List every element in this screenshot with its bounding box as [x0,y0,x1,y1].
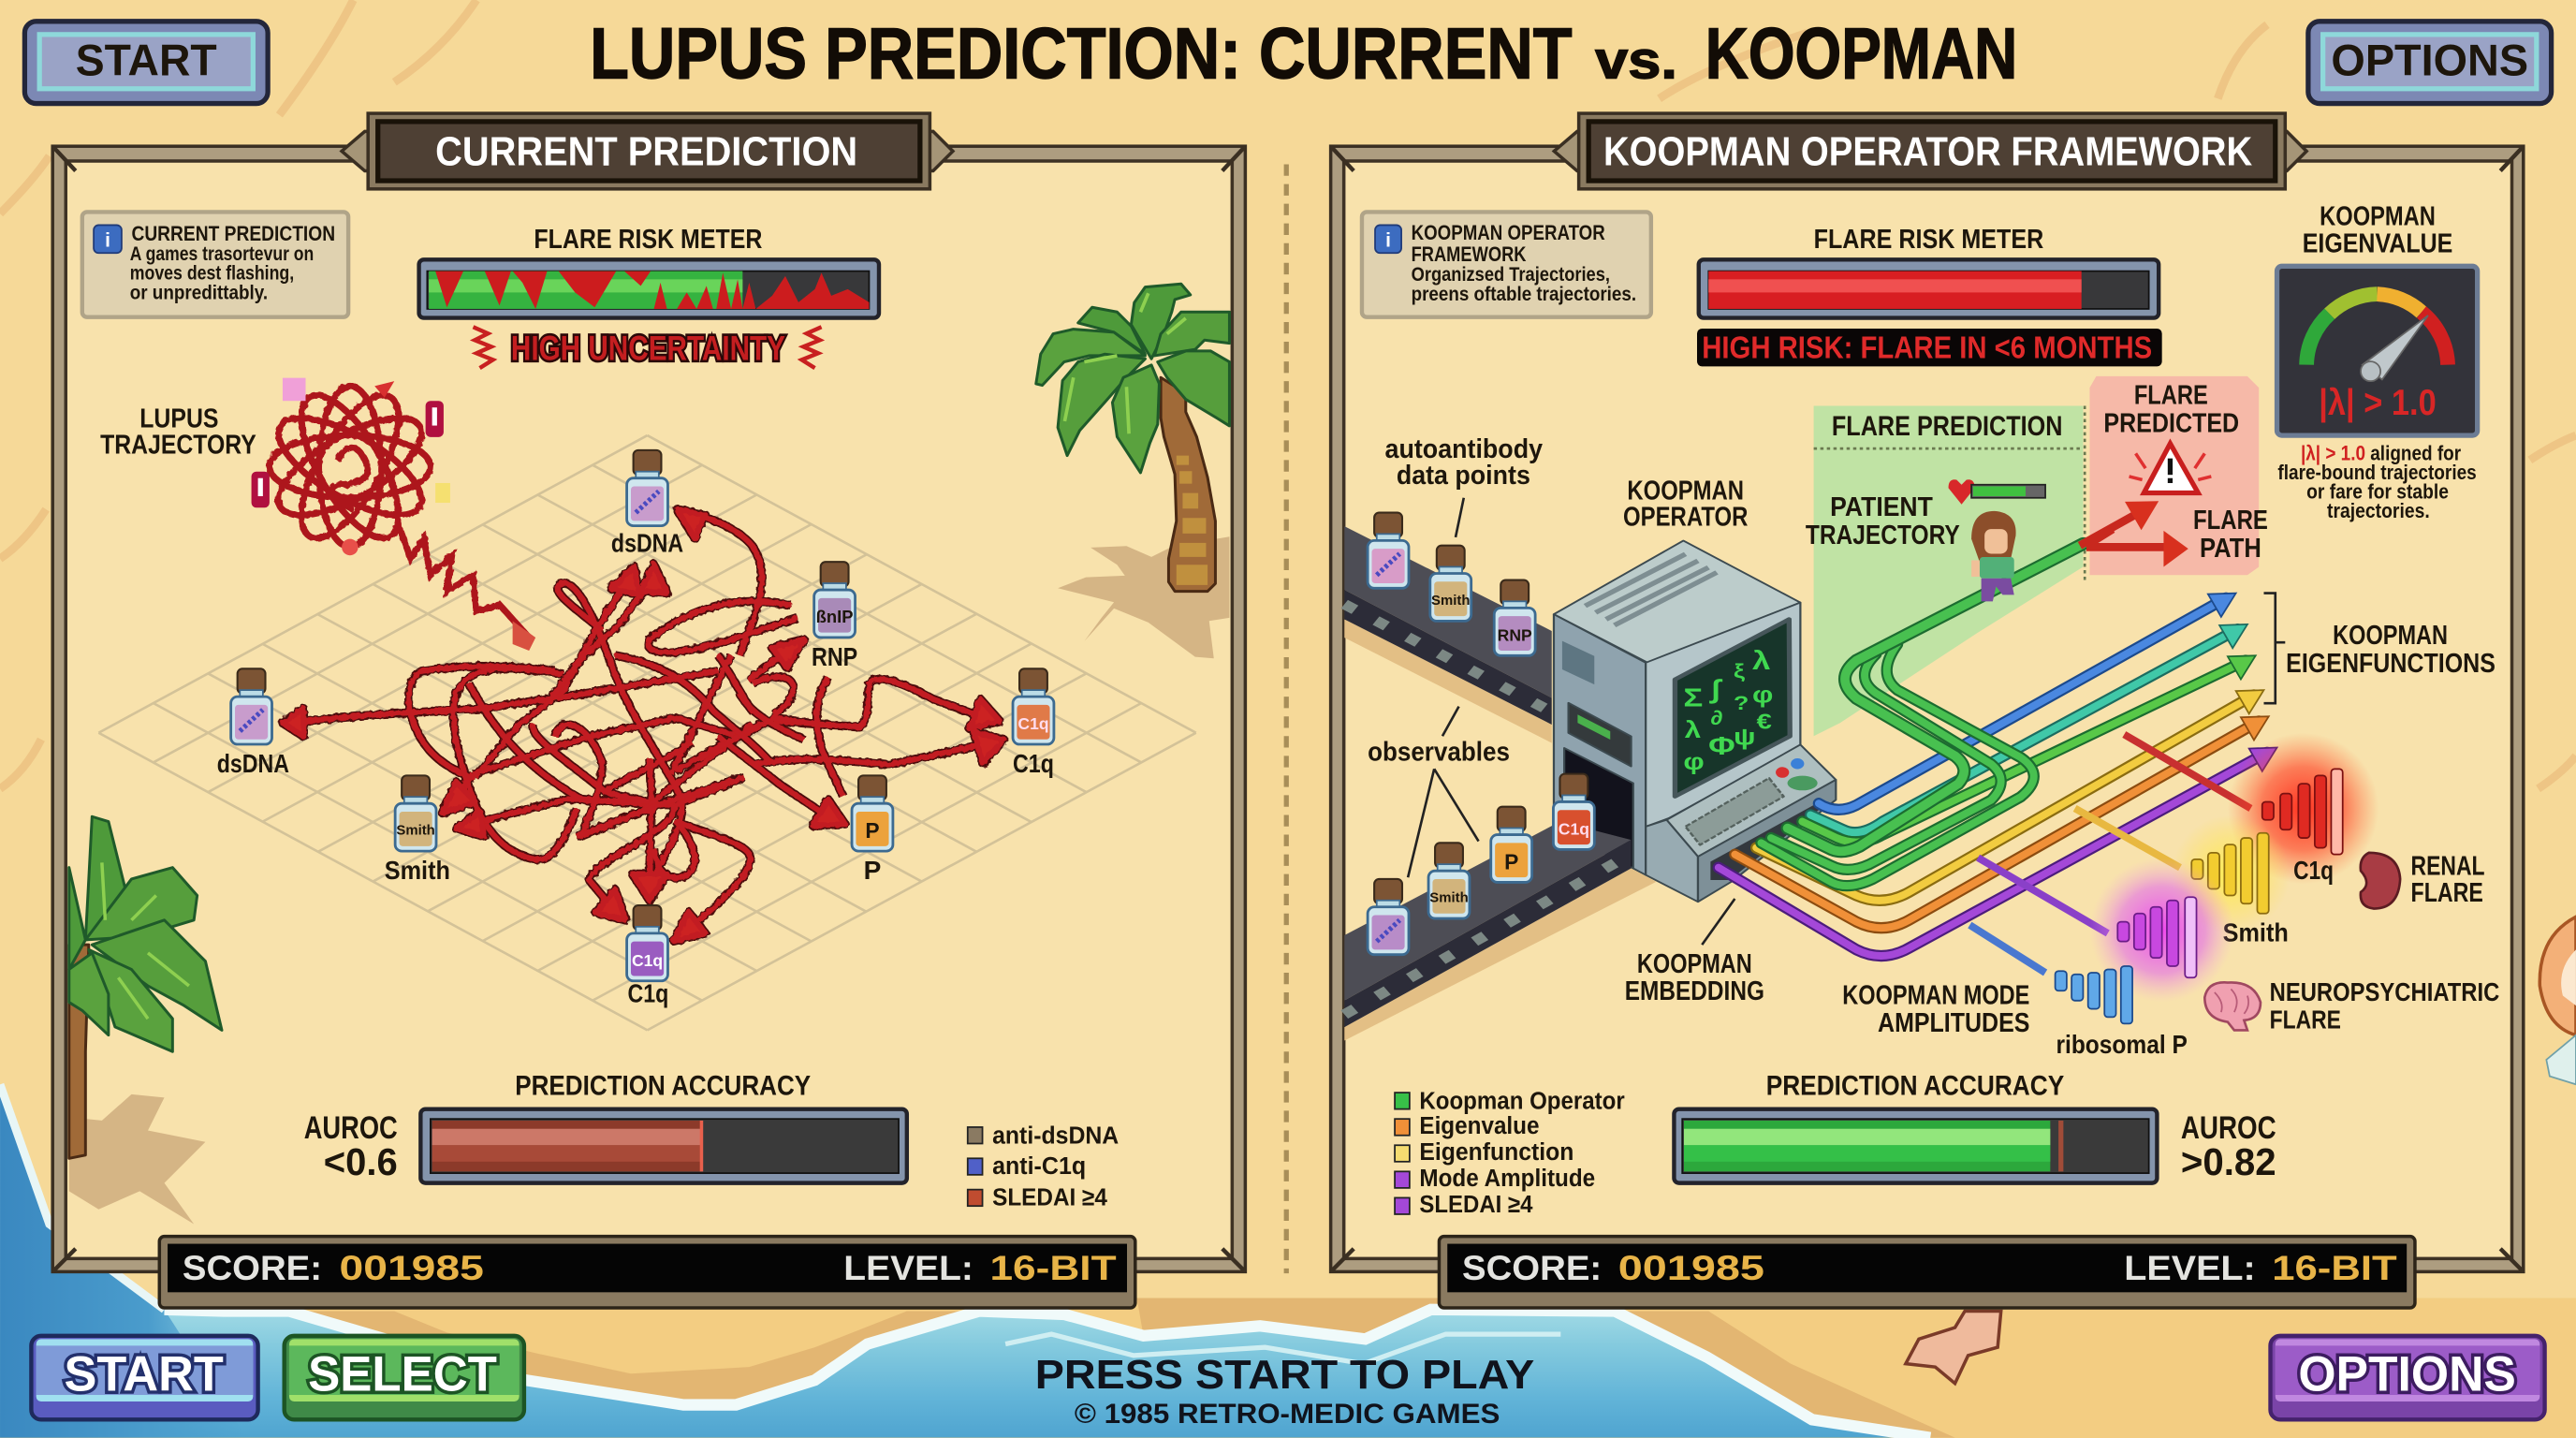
lupus trajectory label: LUPUS [139,404,218,433]
koopman eigenvalue gauge: KOOPMAN [2320,201,2436,231]
koopman operator machine [1554,541,1836,902]
vial: bottom C1q [1553,774,1594,849]
eigenvalue caption: or fare for stable [2306,479,2449,503]
legend: SLEDAI ≥4 [992,1182,1107,1211]
label: flare path [2193,506,2268,564]
header [342,113,953,189]
high uncertainty warning: HIGH UNCERTAINTY [511,329,785,367]
score bar: SCORE: [183,1249,322,1287]
label: autoantibody data points: data points [1397,461,1530,491]
mode bars: purple [2089,858,2234,1003]
vial: P [852,775,893,851]
panel: current prediction [52,113,1245,1308]
auroc value [2181,1110,2276,1183]
vial: bottom C1q: C1q [1559,820,1589,839]
palm tree left [69,816,222,1224]
auroc value [304,1110,398,1183]
info box: KOOPMAN OPERATOR [1412,221,1605,244]
screen glyphs: Σ [1683,682,1703,712]
label: C1q bottom: C1q [627,979,668,1008]
flare risk meter [419,225,879,318]
label: Smith: Smith [385,856,450,885]
flare prediction zone: FLARE PREDICTION [1832,411,2062,442]
vial: C1q right: C1q [1017,714,1049,733]
vial: P: P [865,818,880,843]
screen glyphs: ∂ [1710,707,1723,729]
label: renal flare: FLARE [2411,878,2483,908]
icon: info [94,225,122,253]
info box: or unpredittably. [130,282,268,303]
score bar: 16-BIT [989,1249,1117,1287]
vial: dsDNA left [231,668,272,744]
label: patient trajectory: PATIENT [1830,492,1933,522]
lupus trajectory label: TRAJECTORY [100,430,256,460]
vial: bottom Smith [1428,843,1470,918]
label: koopman operator [1623,477,1748,533]
flare risk meter: FLARE RISK METER [534,225,762,255]
score bar: 001985 [1618,1249,1764,1287]
label: observables: observables [1368,738,1510,768]
vial: RNP: ßnIP [816,607,854,626]
eigenfunction pipes [1719,544,2267,956]
prediction accuracy bar: PREDICTION ACCURACY [515,1071,811,1102]
press start footer: PRESS START TO PLAY [1035,1352,1534,1398]
auroc value: AUROC [2181,1110,2276,1146]
health bar with heart [1949,479,2045,505]
icon: info [1375,225,1401,253]
prediction accuracy bar [420,1071,907,1183]
screen glyphs: ψ [1734,723,1755,750]
flare predicted zone: FLARE [2134,381,2208,411]
legend [968,1121,1119,1211]
label: autoantibody data points [1385,434,1543,537]
title: KOOPMAN [1705,13,2017,94]
screen glyphs: € [1756,709,1772,734]
header: KOOPMAN OPERATOR FRAMEWORK [1603,128,2252,174]
vial: C1q bottom [627,905,667,981]
flare risk meter [1699,225,2159,318]
flare path arrows [2080,487,2188,566]
button: options top: OPTIONS [2331,37,2528,86]
vial: top Smith: Smith [1431,594,1470,609]
score bar: LEVEL: [843,1249,973,1287]
label: patient trajectory: TRAJECTORY [1806,521,1960,550]
legend: anti-dsDNA [992,1121,1119,1149]
high risk banner: HIGH RISK: FLARE IN <6 MONTHS [1702,331,2152,366]
mode bars: Smith yellow [2172,814,2291,933]
label: koopman embedding [1625,899,1764,1006]
vial: RNP [814,562,856,638]
red tangled knot [265,381,529,638]
eigenvalue caption [2277,441,2477,522]
legend: Eigenvalue [1419,1111,1540,1139]
starfish on beach [1906,1312,2001,1384]
auroc value: AUROC [304,1110,398,1146]
eigenfunction arrowheads [2208,581,2284,771]
koopman eigenvalue gauge: |λ| > 1.0 [2319,383,2437,423]
label: C1q right: C1q [1013,749,1054,778]
button: options top [2308,22,2552,104]
icon: warning triangle [2130,444,2211,493]
koopman eigenvalue gauge: EIGENVALUE [2303,228,2452,258]
mode connector lines [1969,734,2250,973]
button: options bottom: OPTIONS [2298,1347,2516,1402]
button: start top: START [76,37,217,86]
label: renal flare [2411,852,2485,908]
label: koopman mode amplitudes [1842,980,2029,1038]
legend: SLEDAI ≥4 [1419,1190,1533,1218]
flare prediction zone [1814,405,2085,736]
eigenvalue caption: flare-bound trajectories [2277,461,2477,484]
eigenvalue caption: |λ| > 1.0 aligned for [2301,441,2461,464]
label: koopman embedding: KOOPMAN [1637,949,1752,979]
label: observables [1368,707,1510,877]
vial: top RNP: RNP [1498,625,1532,644]
screen glyphs: φ [1683,748,1705,774]
button: start top [24,22,268,104]
label: koopman eigenfunctions: KOOPMAN [2333,621,2448,651]
label: neuropsychiatric flare: FLARE [2270,1005,2341,1034]
panel frame [1331,146,2524,1271]
label: koopman operator: KOOPMAN [1627,477,1744,506]
vial: bottom P [1491,807,1532,882]
label: Smith: Smith [2223,918,2289,947]
button: start bottom: START [65,1347,224,1402]
vial: C1q right [1013,668,1054,744]
vial: Smith: Smith [396,824,435,839]
eigenvalue caption: trajectories. [2327,499,2430,522]
panel frame [52,146,1245,1271]
label: neuropsychiatric flare: NEUROPSYCHIATRIC [2270,977,2499,1006]
header [1554,113,2306,189]
vial: top Smith [1430,546,1471,621]
info box: A games trasortevur on [130,243,314,265]
vial: C1q bottom: C1q [632,951,663,970]
vial: top pink [1368,513,1409,588]
legend: Eigenfunction [1419,1137,1573,1166]
conveyor belt top [1344,526,1552,743]
screen glyphs: φ [1752,682,1773,708]
tangled arrows [283,509,1004,941]
label: patient trajectory [1806,492,1960,550]
vial: bottom pink [1368,879,1409,955]
button: select bottom: SELECT [308,1347,497,1402]
flare predicted zone: PREDICTED [2103,409,2239,439]
info box: Organizsed Trajectories, [1412,264,1610,286]
screen glyphs: λ [1752,645,1771,675]
label: flare path: PATH [2200,534,2261,564]
screen glyphs: ∫ [1708,674,1722,704]
icon: info: i [105,229,110,251]
koopman eigenvalue gauge [2277,201,2478,435]
legend: anti-C1q [992,1152,1086,1180]
vial: bottom P: P [1504,849,1518,873]
sparkle icons [252,378,535,651]
score bar [159,1237,1135,1308]
prediction accuracy bar: PREDICTION ACCURACY [1766,1071,2064,1102]
label: dsDNA top: dsDNA [611,529,683,558]
score bar: LEVEL: [2124,1249,2256,1287]
label: renal flare: RENAL [2411,852,2485,882]
label: neuropsychiatric flare [2270,977,2499,1034]
title: LUPUS PREDICTION: CURRENT [590,13,1573,94]
iso grid [98,435,1196,1030]
label: dsDNA left: dsDNA [217,749,289,778]
label: koopman eigenfunctions [2263,594,2496,703]
patient character [1971,511,2016,601]
press start footer: © 1985 RETRO-MEDIC GAMES [1075,1399,1500,1430]
info box: moves dest flashing, [130,262,294,284]
icon: kidney [2361,853,2400,909]
crab at right edge [2539,917,2576,1084]
header: CURRENT PREDICTION [435,128,857,174]
label: RNP: RNP [812,642,857,671]
vial: Smith [395,775,436,851]
palm tree right [1036,284,1229,658]
label: koopman eigenfunctions: EIGENFUNCTIONS [2286,649,2496,679]
mode bars: C1q red [2228,733,2378,884]
screen glyphs [1683,645,1773,774]
label: koopman mode amplitudes: AMPLITUDES [1878,1008,2029,1038]
legend [1395,1087,1625,1218]
icon: info: i [1385,229,1391,251]
auroc value: >0.82 [2181,1140,2276,1183]
score bar: 16-BIT [2272,1249,2397,1287]
info box [1362,212,1651,317]
label: koopman embedding: EMBEDDING [1625,976,1764,1006]
label: C1q: C1q [2293,856,2334,885]
panel: koopman operator framework [1331,113,2524,1308]
vial: bottom Smith: Smith [1429,891,1469,906]
label: koopman mode amplitudes: KOOPMAN MODE [1842,980,2029,1010]
flare risk meter: FLARE RISK METER [1814,225,2043,255]
auroc value: <0.6 [324,1140,398,1183]
lupus trajectory label [100,404,256,460]
ocean and surf [0,1084,1930,1438]
score bar [1439,1237,2415,1308]
title: vs. [1595,30,1677,89]
button: start bottom [31,1336,258,1419]
screen glyphs: ? [1734,692,1749,714]
info box [82,212,348,317]
label: ribosomal P: ribosomal P [2056,1030,2188,1059]
label: flare path: FLARE [2193,506,2268,536]
score bar: SCORE: [1462,1249,1602,1287]
score bar: 001985 [339,1249,484,1287]
info box: preens oftable trajectories. [1412,284,1636,305]
label: autoantibody data points: autoantibody [1385,434,1543,464]
vial: dsDNA top [627,450,667,526]
screen glyphs: Φ [1708,730,1735,760]
label: P: P [864,856,881,885]
press start footer [1035,1352,1534,1430]
label: koopman operator: OPERATOR [1623,503,1748,533]
screen glyphs: ξ [1734,660,1745,682]
info box: FRAMEWORK [1412,242,1527,266]
button: options bottom [2271,1336,2545,1419]
screen glyphs: λ [1685,716,1701,743]
legend: Mode Amplitude [1419,1164,1595,1192]
mode bars: ribosomal P blue [2056,966,2132,1023]
button: select bottom [285,1336,524,1419]
flare predicted zone [2089,376,2259,575]
legend: Koopman Operator [1419,1087,1625,1115]
prediction accuracy bar [1674,1071,2157,1183]
conveyor belt bottom [1344,822,1656,1040]
info box: CURRENT PREDICTION [131,222,335,245]
vial: top RNP [1494,580,1535,655]
icon: brain [2204,982,2261,1030]
divider [1285,165,1288,1273]
